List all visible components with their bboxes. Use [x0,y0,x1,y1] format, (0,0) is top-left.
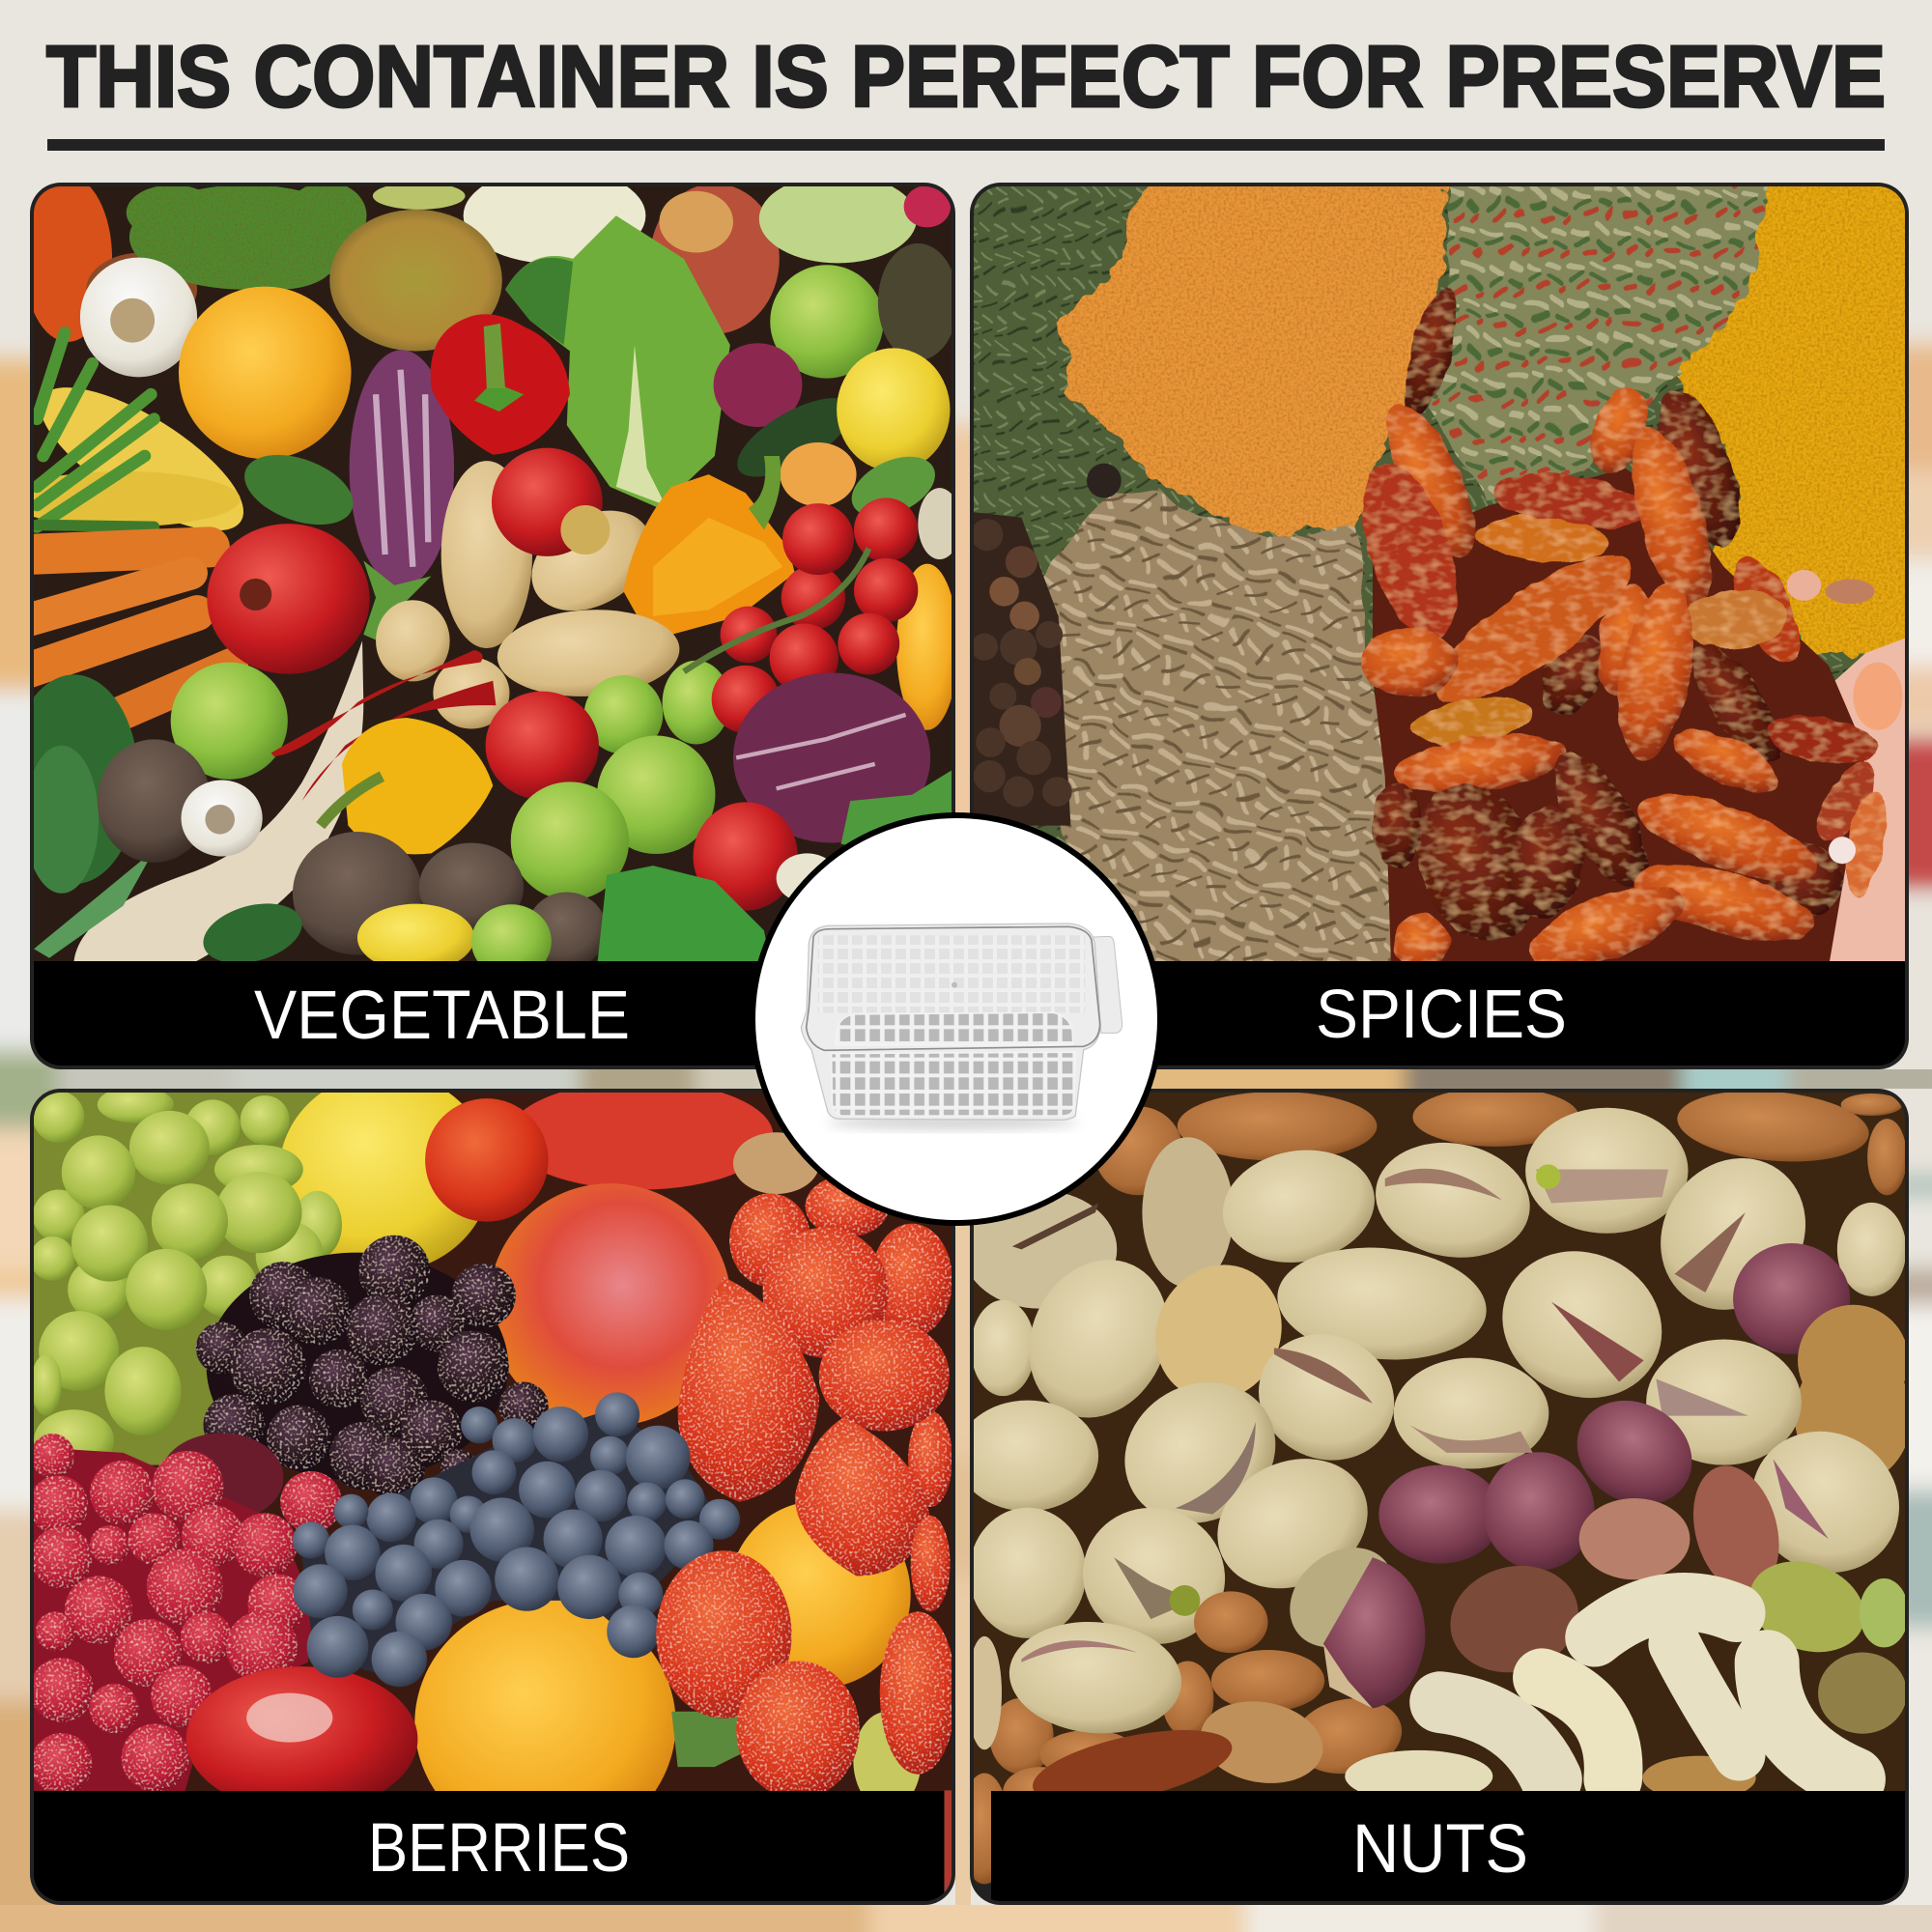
photo: berries [25,1072,963,1901]
label: NUTS: NUTS [1352,1811,1528,1888]
label bar: spicies [1155,961,1905,1065]
panel: berries [25,1072,963,1905]
label: SPICIES: SPICIES [1316,977,1567,1053]
container body [801,923,1100,1120]
panel: nuts [956,1083,1927,1905]
panel: spicies [941,148,1932,1069]
label: VEGETABLE: VEGETABLE [254,978,630,1054]
title underline [47,139,1885,151]
panel: vegetable [6,167,961,1069]
label bar: vegetable [34,961,757,1065]
icon: clear storage container [801,923,1122,1129]
container tab handle [1094,936,1122,1033]
label: BERRIES: BERRIES [368,1810,630,1887]
photo: spices [941,148,1932,1065]
photo: nuts [956,1083,1927,1901]
center badge: container product [753,815,1160,1223]
label bar: nuts [991,1791,1909,1901]
label bar: berries [34,1791,944,1901]
photo: vegetables [6,167,961,1065]
